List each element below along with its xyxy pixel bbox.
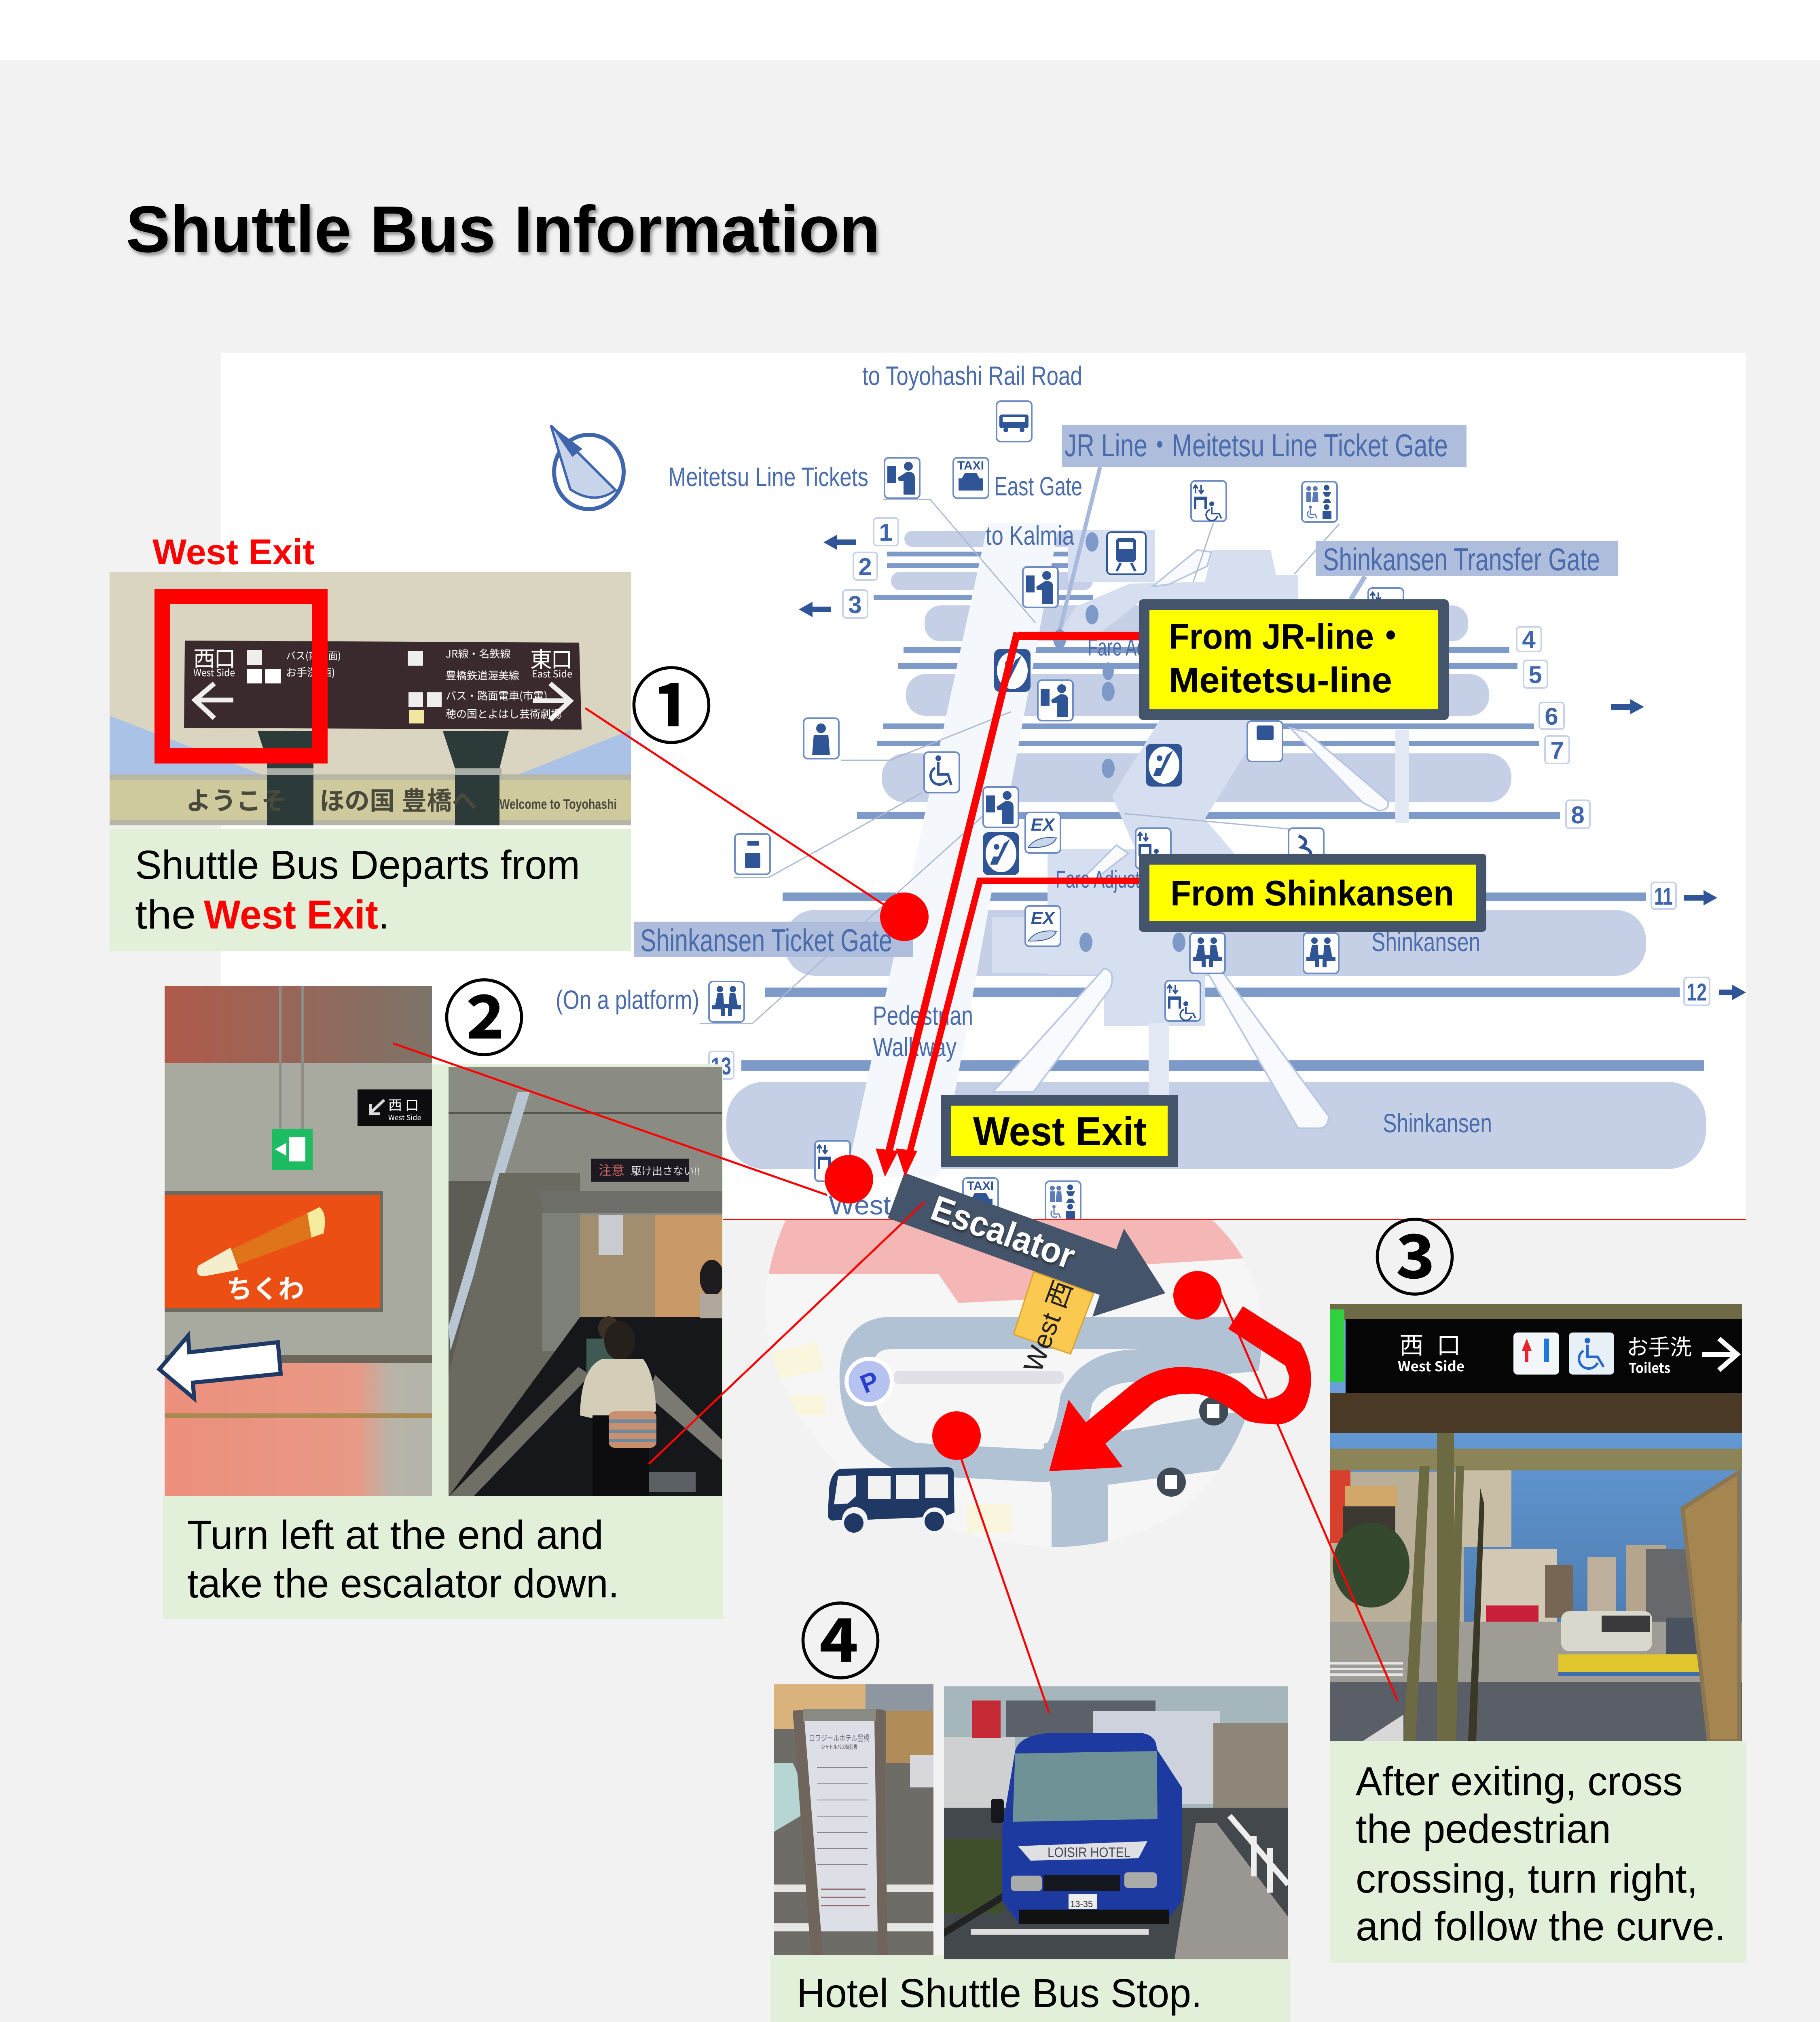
step number 3: ③ — [1373, 1192, 1456, 1312]
wall banner text: Welcome to Toyohashi — [499, 797, 617, 812]
overhead direction sign: West Side — [193, 665, 235, 679]
box: From JR-line Meitetsu-line: From JR-line・ — [1169, 616, 1407, 656]
panel: step 2 photos and caption — [159, 986, 724, 1619]
escalator arrow: Escalator — [926, 1188, 1080, 1276]
wall banner text — [186, 787, 617, 815]
caption 2: Turn left at the end and — [187, 1512, 603, 1558]
caption 1: the — [135, 892, 196, 937]
route: from JR line — [876, 632, 1142, 1177]
caption 3: After exiting, cross — [1356, 1759, 1682, 1804]
map: track numbers and direction arrows — [709, 518, 1746, 1080]
map label: Pedestrian Walkway — [873, 1000, 973, 1062]
photo 4a: bus stop sign: ロワジールホテル豊橋 — [809, 1734, 870, 1743]
map: track numbers and direction arrows: 6 — [1545, 703, 1558, 730]
map label: Fare Adjustment — [1056, 634, 1209, 893]
shuttle bus body: 13-35 — [1070, 1899, 1093, 1909]
caption 2: take the escalator down. — [187, 1561, 619, 1606]
map: track numbers and direction arrows: 11 — [1654, 883, 1673, 910]
West Exit map sign: West 西口 — [1018, 1252, 1087, 1376]
red separator line — [722, 1219, 1746, 1220]
photo 2a: station corridor — [165, 986, 432, 1496]
map: track numbers and direction arrows: 7 — [1550, 737, 1564, 764]
map icons: EX — [1031, 908, 1056, 928]
illuminated West Side sign: お手洗 — [1627, 1329, 1692, 1361]
road badges — [1157, 1396, 1228, 1497]
map icons: TAXI — [957, 459, 984, 472]
illuminated West Side sign: West Side — [1398, 1356, 1464, 1375]
box: From JR-line Meitetsu-line — [1139, 599, 1449, 720]
photo 4b: shuttle bus — [944, 1686, 1288, 1959]
overhead direction sign: 東 口 — [530, 642, 573, 674]
overhead direction sign: バス(南方面) — [286, 648, 341, 662]
photo 2a: station corridor: ちくわ — [226, 1275, 304, 1304]
map: track numbers and direction arrows: 13 — [711, 1053, 731, 1080]
caption 1: . — [378, 892, 389, 937]
sign columns — [258, 731, 509, 825]
map: track numbers and direction arrows: 4 — [1522, 626, 1536, 653]
highlight frame and West Exit label — [152, 532, 320, 756]
escalator arrow — [888, 1173, 1165, 1317]
photo 4a: bus stop sign — [774, 1684, 933, 1955]
overhead direction sign: 穂の国とよはし芸術劇場 — [446, 706, 561, 721]
map icons — [709, 401, 1403, 1222]
curved route arrow — [1049, 1306, 1311, 1471]
box: West Exit: West Exit — [973, 1109, 1147, 1154]
box: From Shinkansen — [1139, 854, 1486, 932]
panel: area map around West Exit — [760, 1217, 1266, 1553]
gate label: JR Line Meitetsu Line Ticket Gate: JR Line・Meitetsu Line Ticket Gate — [1064, 427, 1448, 463]
photo 1: West Exit sign — [110, 572, 631, 825]
pedestrian walkway — [846, 523, 1059, 1177]
highlight frame and West Exit label: West Exit — [152, 532, 315, 572]
photo 2a: station corridor: 西 口 — [388, 1094, 419, 1114]
caption 4: Hotel Shuttle Bus Stop. — [797, 1971, 1202, 2016]
shuttle bus body — [991, 1733, 1182, 1924]
illuminated West Side sign: Toilets — [1629, 1357, 1670, 1377]
compass — [551, 425, 624, 509]
caption 3: the pedestrian — [1356, 1806, 1611, 1852]
map: track numbers and direction arrows: 5 — [1528, 661, 1542, 688]
step number 4: ④ — [799, 1576, 882, 1696]
photo 2b: escalator: 注意 — [599, 1163, 624, 1178]
location dots — [825, 893, 1222, 1460]
route: from Shinkansen — [896, 878, 1142, 1177]
overhead direction sign: お手洗(西) — [286, 664, 335, 679]
map: track numbers and direction arrows: 8 — [1571, 802, 1585, 829]
map label: Fare Adjustment: Fare Adjustment — [1056, 866, 1177, 893]
map icons: TAXI — [967, 1179, 994, 1193]
map: track numbers and direction arrows: 12 — [1687, 979, 1707, 1006]
box: From JR-line Meitetsu-line: Meitetsu-line — [1169, 660, 1392, 700]
overhead direction sign: 西 口 — [193, 641, 236, 673]
door frame — [1330, 1401, 1742, 1741]
gate label: Shinkansen Ticket Gate: Shinkansen Ticket Gate — [640, 922, 892, 958]
map platforms and tracks — [700, 467, 1706, 1177]
map: track numbers and direction arrows: 2 — [858, 553, 872, 580]
caption 3 — [1330, 1741, 1746, 1963]
people on escalator — [598, 1316, 619, 1341]
photo 4a: bus stop sign: シャトルバス時刻表 — [821, 1744, 857, 1750]
photo 2b: escalator: 駆け出さない!! — [631, 1165, 700, 1177]
panel: step 3 photo and caption — [1330, 1304, 1746, 1963]
step number 2: ② — [443, 953, 525, 1072]
overhead direction sign: JR線・名鉄線 — [446, 646, 510, 661]
map label: Shinkansen platform lower: Shinkansen — [1383, 1108, 1492, 1138]
wall banner text: ようこそ — [186, 787, 286, 815]
caption 3: and follow the curve. — [1356, 1904, 1726, 1949]
caption 3: crossing, turn right, — [1356, 1856, 1698, 1901]
icon: bus — [828, 1467, 954, 1533]
map label: to Toyohashi Rail Road: to Toyohashi Rail Road — [862, 361, 1082, 391]
map: track numbers and direction arrows: 3 — [848, 591, 862, 618]
caption 1: Shuttle Bus Departs from — [135, 842, 580, 888]
map: track numbers and direction arrows: 1 — [879, 519, 893, 546]
box: From Shinkansen: From Shinkansen — [1170, 873, 1454, 913]
map label: West Gate: West Gate — [829, 1190, 958, 1220]
photo 2a: station corridor: West Side — [388, 1112, 421, 1123]
gate label: Shinkansen Transfer Gate: Shinkansen Transfer Gate — [1323, 541, 1600, 577]
photo 3: exit view — [1330, 1304, 1742, 1741]
map label: Pedestrian Walkway: Pedestrian — [873, 1000, 973, 1030]
parking marker: P — [856, 1365, 883, 1399]
shuttle bus body: LOISIR HOTEL — [1048, 1845, 1130, 1860]
title: Shuttle Bus Information — [126, 192, 880, 266]
map label: On a platform: (On a platform) — [556, 985, 699, 1015]
West Exit map sign — [1013, 1271, 1094, 1369]
wall banner text: ほの国 豊橋へ — [320, 787, 477, 815]
map label: Meitetsu Line Tickets: Meitetsu Line Tickets — [668, 462, 868, 492]
panel: step 4 photos and caption — [770, 1684, 1290, 2022]
overhead direction sign: バス・路面電車(市電) — [446, 688, 548, 703]
map label: Pedestrian Walkway: Walkway — [873, 1032, 957, 1062]
map label: East Gate: East Gate — [994, 471, 1082, 501]
photo 2b: escalator — [449, 1067, 724, 1497]
arrow: turn left — [159, 1336, 281, 1398]
illuminated West Side sign: 西 口 — [1399, 1326, 1461, 1361]
overhead direction sign: 豊橋鉄道渥美線 — [446, 668, 519, 683]
map label: to Kalmia: to Kalmia — [986, 520, 1074, 550]
step number 1: ① — [630, 641, 713, 760]
panel: station map — [221, 353, 1746, 1222]
overhead direction sign: East Side — [532, 666, 572, 680]
caption 2 — [163, 1496, 723, 1619]
map label: Fare Adjustment: Fare Adjustment — [1088, 634, 1209, 661]
map label: Shinkansen platform upper: Shinkansen — [1371, 927, 1480, 957]
parking marker — [847, 1359, 892, 1404]
caption 1: West Exit — [204, 892, 378, 937]
illuminated West Side sign — [1346, 1319, 1742, 1393]
caption 1 — [110, 829, 631, 951]
map icons: EX — [1031, 815, 1056, 835]
overhead direction sign — [184, 641, 582, 730]
leader lines — [393, 708, 1398, 1713]
caption 4 — [770, 1955, 1290, 2022]
box: West Exit — [941, 1095, 1178, 1167]
